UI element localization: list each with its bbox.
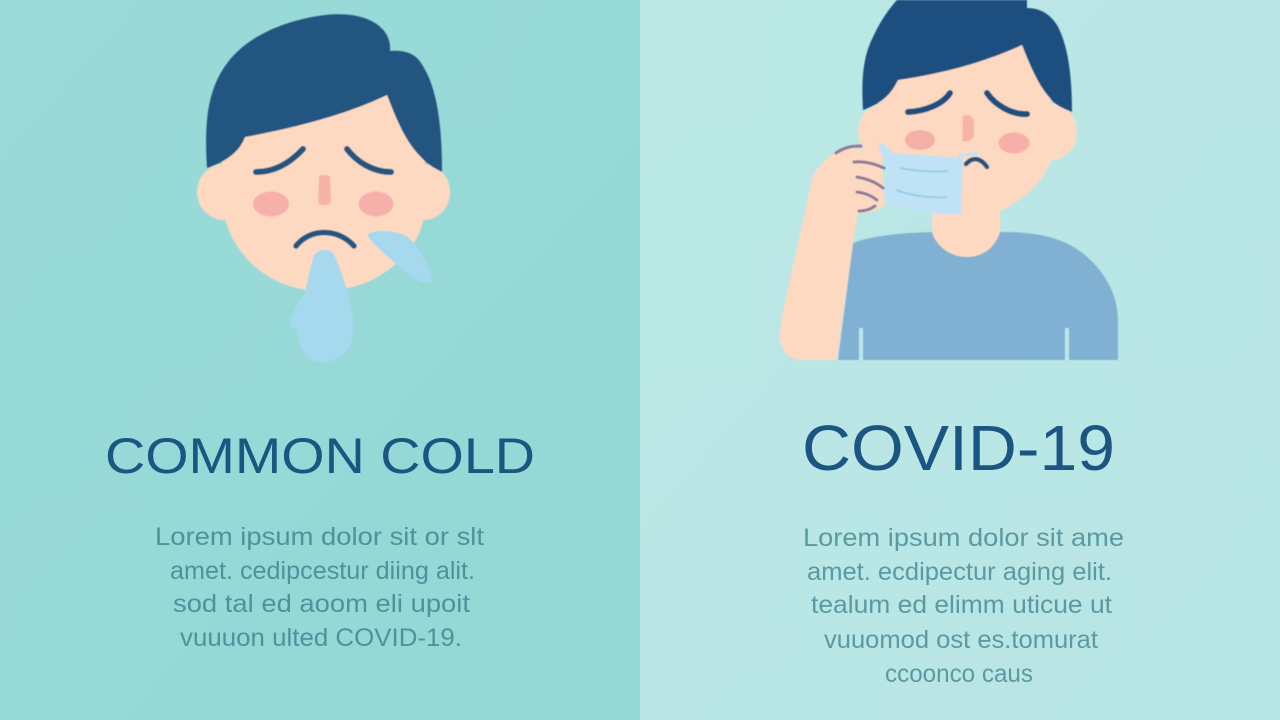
nose [318, 175, 331, 205]
body text: covid-19: ccoonco caus [885, 660, 1033, 688]
fingers [836, 146, 884, 211]
sneeze spray: mouth [290, 250, 354, 362]
body text: covid-19: amet. ecdipectur aging elit. [807, 558, 1112, 586]
body text: covid-19: Lorem ipsum dolor sit ame [803, 524, 1124, 552]
face [222, 70, 425, 291]
eyes [908, 93, 1027, 114]
cheeks [253, 192, 394, 216]
mouth [966, 159, 987, 167]
mouth [296, 232, 354, 246]
illustration: sick face sneezing [197, 14, 450, 362]
face [879, 40, 1055, 217]
body text: common cold [155, 523, 484, 652]
illustration: person with mask [780, 0, 1118, 360]
ears [858, 104, 1077, 160]
body text: covid-19: tealum ed elimm uticue ut [811, 591, 1112, 619]
neck [932, 195, 1000, 257]
hair [862, 0, 1072, 112]
body text: common cold: vuuuon ulted COVID-19. [180, 624, 462, 652]
shirt sleeve lines [861, 328, 1067, 360]
heading: common cold: COMMON COLD [105, 428, 535, 484]
panel: covid-19 [640, 0, 1280, 720]
ears [197, 164, 450, 220]
hair [206, 14, 442, 172]
body text: common cold: sod tal ed aoom eli upoit [173, 590, 470, 618]
eyes [256, 149, 391, 172]
body text: common cold: amet. cedipcestur diing alit. [170, 557, 475, 585]
sneeze spray: side [367, 231, 432, 283]
body text: covid-19 [803, 524, 1124, 688]
arm [780, 149, 885, 360]
heading: covid-19: COVID-19 [802, 412, 1115, 484]
nose [962, 115, 974, 141]
body text: covid-19: vuuomod ost es.tomurat [824, 626, 1098, 654]
mask [877, 141, 978, 214]
shirt [838, 232, 1118, 360]
panel: common cold [0, 0, 640, 720]
cheeks [905, 130, 1030, 154]
body text: common cold: Lorem ipsum dolor sit or slt [155, 523, 484, 551]
